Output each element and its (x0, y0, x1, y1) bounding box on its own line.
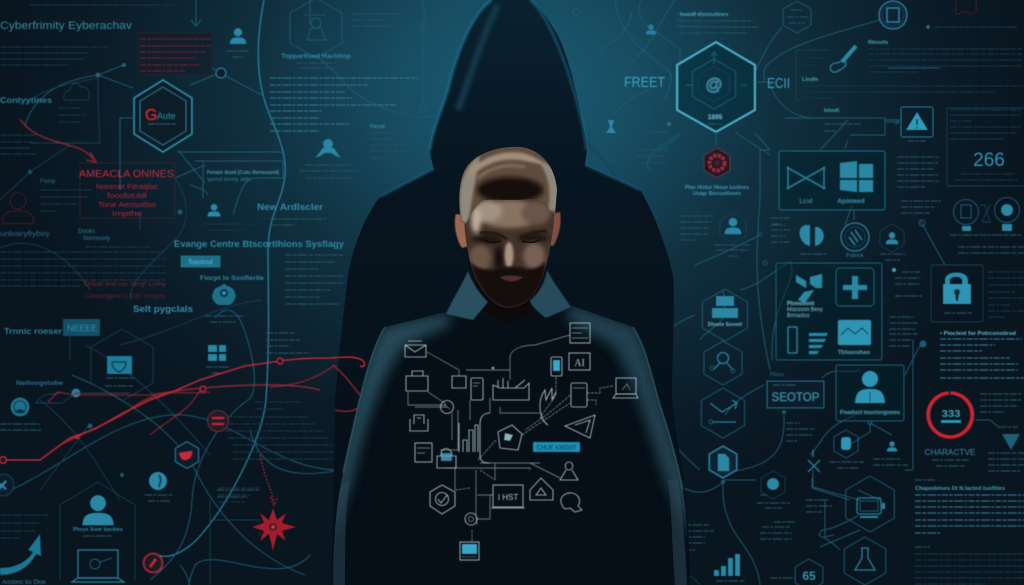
man (332, 140, 690, 585)
icon: monitor: I HST (498, 493, 518, 502)
flower label (205, 316, 244, 322)
red heading block: Impthe (112, 209, 142, 218)
icon: question badge (149, 472, 167, 490)
small person top (646, 24, 656, 34)
icon: red person dim (2, 193, 34, 224)
person panel: Fnaduct teuctorgnnes (840, 410, 900, 416)
bullet node (892, 268, 896, 272)
long text block (802, 86, 1024, 98)
hex top center (290, 0, 342, 58)
cloud icon (64, 83, 89, 100)
fine connector (35, 393, 130, 490)
blue label (533, 442, 580, 452)
icon: small diagonal arrows (0, 474, 14, 496)
side text (680, 525, 714, 550)
label Donate: Dooks (78, 229, 95, 235)
small arrow (886, 119, 899, 125)
text lines (760, 522, 795, 539)
ring side text (980, 394, 1022, 427)
text lines (40, 190, 92, 211)
red hex caption: Usagr Becruotlunes (693, 191, 741, 197)
lines (680, 21, 758, 33)
bulb caption (950, 235, 1024, 253)
hex 65: 65 (802, 569, 816, 583)
icon: curved arrow bottom-left (0, 534, 41, 575)
cross icon (808, 450, 820, 472)
icon: rounded frame (480, 413, 490, 463)
top left right-side heading: Isasdf distosdtnes (680, 12, 728, 18)
heading sublines (296, 63, 338, 68)
connector (845, 140, 854, 220)
hex icon device (702, 289, 748, 341)
text lines (895, 272, 922, 296)
diamond icon (1002, 434, 1020, 450)
hex icon magnifier (704, 341, 742, 385)
text lines (771, 225, 790, 242)
icon: AI box (569, 353, 590, 370)
red hex caption (685, 185, 749, 197)
266 panel: 266 (973, 150, 1005, 171)
text lines (218, 402, 338, 502)
SEOTOP box: SEOTOP (772, 392, 820, 404)
text block with bullets (370, 124, 412, 158)
text lines block (270, 78, 418, 131)
side text (889, 317, 918, 346)
tiny label (602, 136, 620, 141)
icon: large person (82, 495, 114, 525)
icon: hand (540, 388, 556, 425)
red ring chart (928, 393, 973, 437)
266 panel (947, 108, 1024, 186)
box with text: Intodt (824, 108, 839, 114)
icon: hex person (880, 224, 905, 260)
text lines (786, 423, 815, 441)
teal button: Toastrout (188, 260, 213, 266)
red line ends over hood (330, 357, 365, 411)
brows and closed eyes (480, 231, 547, 242)
label: Nonresoly (83, 236, 110, 242)
red text lines: Ostott lind ruc fung! Lofny (84, 281, 167, 288)
central hexagon with G (134, 80, 192, 152)
icon: folder (406, 371, 428, 391)
neck (470, 268, 545, 325)
icon: person (230, 28, 246, 44)
shirt network diagram (405, 323, 638, 560)
hex icon red shield like (757, 471, 790, 508)
icon: small circle (465, 513, 477, 525)
icon: red starburst (252, 508, 296, 551)
labels (803, 58, 822, 65)
person label: Phsys Sonr backles (73, 527, 123, 533)
icon: bag (410, 415, 428, 431)
teal button (181, 256, 220, 267)
teal box: NEEEE (67, 324, 97, 333)
rounded frame (796, 50, 828, 100)
icon: person hex (720, 213, 746, 243)
left small label: Nelloogelobe (16, 380, 63, 387)
warning box (901, 107, 933, 141)
icon: box (452, 376, 466, 388)
circular icon (879, 1, 907, 29)
person mini (887, 441, 897, 452)
Contyytines heading: Contyytines (0, 95, 52, 105)
rectangular callout: Fenaio dood (Cuto thensound) (207, 170, 279, 176)
SEOTOP box (767, 381, 824, 408)
icon: bottom device (460, 542, 479, 560)
hex monitor (846, 476, 894, 532)
connector (812, 478, 850, 500)
right of tiles text (266, 333, 310, 353)
hex frame around person (60, 482, 135, 580)
bottom paragraph: Chapedelses Dt N.lacted tuoflites (915, 486, 1005, 492)
icon: document (415, 443, 432, 462)
person sub-label (83, 535, 112, 537)
red ring chart: 333 (942, 409, 961, 420)
text lines (206, 367, 230, 373)
labels (806, 500, 832, 512)
labels (829, 459, 908, 468)
dim red icon (955, 0, 976, 14)
icon: flower badge (212, 283, 236, 305)
person label (226, 51, 250, 57)
node (72, 388, 80, 398)
icon: grid tiles (208, 345, 226, 361)
top left heading: Cyberfrimity Eyberachav (0, 20, 133, 32)
hex icon device: Dlosse Suvoet (708, 322, 743, 328)
multi icons panel: Hiansoon Bexy (787, 307, 823, 313)
bulb icons (954, 198, 1020, 231)
text lines (0, 515, 48, 538)
small node (926, 25, 930, 29)
hex 65 (795, 559, 823, 585)
ears (455, 212, 561, 248)
text lines (634, 132, 668, 163)
node (178, 210, 182, 214)
icon: circle gauge (440, 400, 454, 414)
Trnnic label: Trnnic roeser (4, 327, 62, 336)
side label: Piiasa (770, 372, 784, 378)
Rleoofs heading: Rleoofs (868, 40, 888, 46)
connection lines (408, 335, 613, 543)
long text block (868, 49, 1022, 72)
red text lines: Constogent C Cth oropos (84, 293, 167, 300)
node icon user (10, 398, 30, 416)
main hexagon: 1895 (708, 114, 723, 121)
person label (680, 216, 750, 256)
multi icons panel (776, 263, 882, 360)
icon: AI box: AI (574, 358, 585, 369)
icon: bar chart (459, 423, 478, 452)
bars (714, 554, 745, 581)
icon: circle hand: Fotnck (846, 253, 864, 259)
icon: chart tray (493, 378, 529, 400)
hex flask (844, 537, 886, 585)
label sub lines (932, 453, 1024, 471)
left label: unloaryfiyboy (0, 229, 50, 238)
bullet list (940, 331, 1024, 378)
icon: phone (471, 378, 483, 400)
connectors (130, 178, 186, 300)
rectangular callout (190, 161, 283, 215)
central hexagon with G: G (145, 107, 157, 124)
connectors (660, 82, 770, 155)
multi icons panel: Brroaolcs (787, 313, 810, 319)
icon: center hex (498, 425, 522, 450)
icon: hex check (430, 485, 455, 514)
icon: laptop (613, 378, 638, 398)
label (770, 577, 795, 579)
person panel (836, 365, 904, 421)
Self heading: Selt pygclals (133, 304, 193, 315)
icon label (299, 165, 358, 178)
text column (897, 157, 940, 187)
Evanga heading: Evange Centre Btscortlhions Sysfiagy (174, 239, 344, 249)
red text lines (84, 281, 167, 300)
icons panel (779, 151, 885, 210)
central hexagon with G: Aute (157, 111, 176, 121)
small label: Fiona (40, 179, 56, 185)
icon: red gear hexagon (704, 148, 730, 178)
icons panel: Aponwed (838, 199, 865, 205)
collar (446, 270, 571, 320)
shirt (332, 303, 690, 585)
faint panel lines (30, 78, 100, 143)
FREET label: FREET (624, 75, 665, 91)
red heading block: fooolstuldl (107, 191, 147, 200)
red line network (0, 358, 335, 505)
Toppartised heading: Toppartised Hacktiop (281, 53, 351, 60)
icon: red ring (144, 554, 162, 572)
text lines (771, 201, 941, 224)
icon: blue phone (551, 357, 562, 376)
text lines (0, 108, 85, 154)
paragraph lines (0, 247, 165, 286)
hex side text (352, 14, 400, 26)
text lines (0, 424, 42, 430)
mouth (500, 276, 523, 282)
red heading block: Tone Aensotlos (98, 200, 156, 209)
icon: red hexagon (175, 442, 199, 468)
New Ardlscler heading: New Ardlscler (257, 202, 323, 213)
bottom paragraph (915, 480, 1024, 584)
ECII label: ECII (767, 76, 790, 92)
red heading block: AMEACLA ONINES (79, 168, 174, 180)
lock panel (931, 265, 983, 322)
icon: blue lock (437, 448, 456, 468)
text lines (145, 490, 260, 501)
icon: triangle (565, 415, 595, 438)
teal box (63, 319, 100, 336)
lock side text (988, 272, 1024, 317)
red heading block (79, 163, 175, 218)
small label (760, 494, 768, 496)
beard (470, 262, 545, 308)
text block with bullets: Fiesal (370, 124, 385, 130)
icon: cube (530, 478, 553, 500)
curved line (0, 243, 90, 290)
Lindle heading: Lindle (802, 77, 818, 83)
icon: circle hand (841, 223, 869, 259)
hooded figure (332, 0, 690, 585)
icons panel: Lcnd (799, 199, 813, 205)
guitar icon (830, 46, 856, 72)
label: Fiorpt lo Svoflerlle (200, 276, 265, 282)
face (464, 199, 554, 308)
bullet list: • Pioclent for Potrconstirod (940, 331, 1016, 337)
hex icon document (709, 446, 737, 478)
small node (667, 122, 671, 126)
hex icon shield (834, 430, 858, 458)
icon: device (571, 383, 587, 407)
bullets text (285, 255, 345, 304)
connector (975, 420, 1000, 428)
icon: envelope (405, 341, 426, 357)
icon: person outline (560, 462, 578, 480)
multi icons panel: Tblooruhao (838, 350, 871, 356)
small text (647, 14, 700, 39)
blue label: CHUE KMSHT (536, 445, 577, 452)
box with text (785, 108, 885, 135)
text lines (270, 219, 326, 225)
hexagon connectors (0, 63, 283, 200)
CHARACTVE label: CHARACTVE (924, 448, 976, 457)
icon: red badge (208, 410, 228, 432)
main hexagon: @ (705, 75, 723, 94)
top hex (783, 1, 811, 33)
faint frames (70, 330, 260, 585)
hex icon arrows (701, 388, 745, 438)
icon: connected person (315, 139, 341, 158)
icon: half globes (800, 225, 826, 254)
top left text lines (0, 5, 175, 65)
red hex caption: Plan Hiotur Hioue luotlnes (685, 185, 749, 191)
red text box (138, 33, 212, 75)
multi icons panel: Ploosisoot (787, 301, 814, 307)
hair (459, 146, 557, 224)
icon: tiny figure (606, 120, 616, 133)
icon: monitor (491, 485, 525, 508)
small text (935, 26, 1018, 28)
red curved arrow (20, 119, 96, 162)
text lines (204, 224, 254, 230)
icon: cup (561, 493, 582, 512)
red heading block: Norenot Fitraqloc (96, 182, 158, 191)
icon: person (207, 204, 221, 217)
rectangular callout: sprind toosly aldo (207, 177, 251, 183)
main hexagon (677, 42, 755, 132)
arrow down (191, 0, 201, 26)
icon: document top right (570, 323, 590, 343)
icon hex with monitor (91, 329, 153, 401)
icon: laptop (72, 550, 124, 582)
